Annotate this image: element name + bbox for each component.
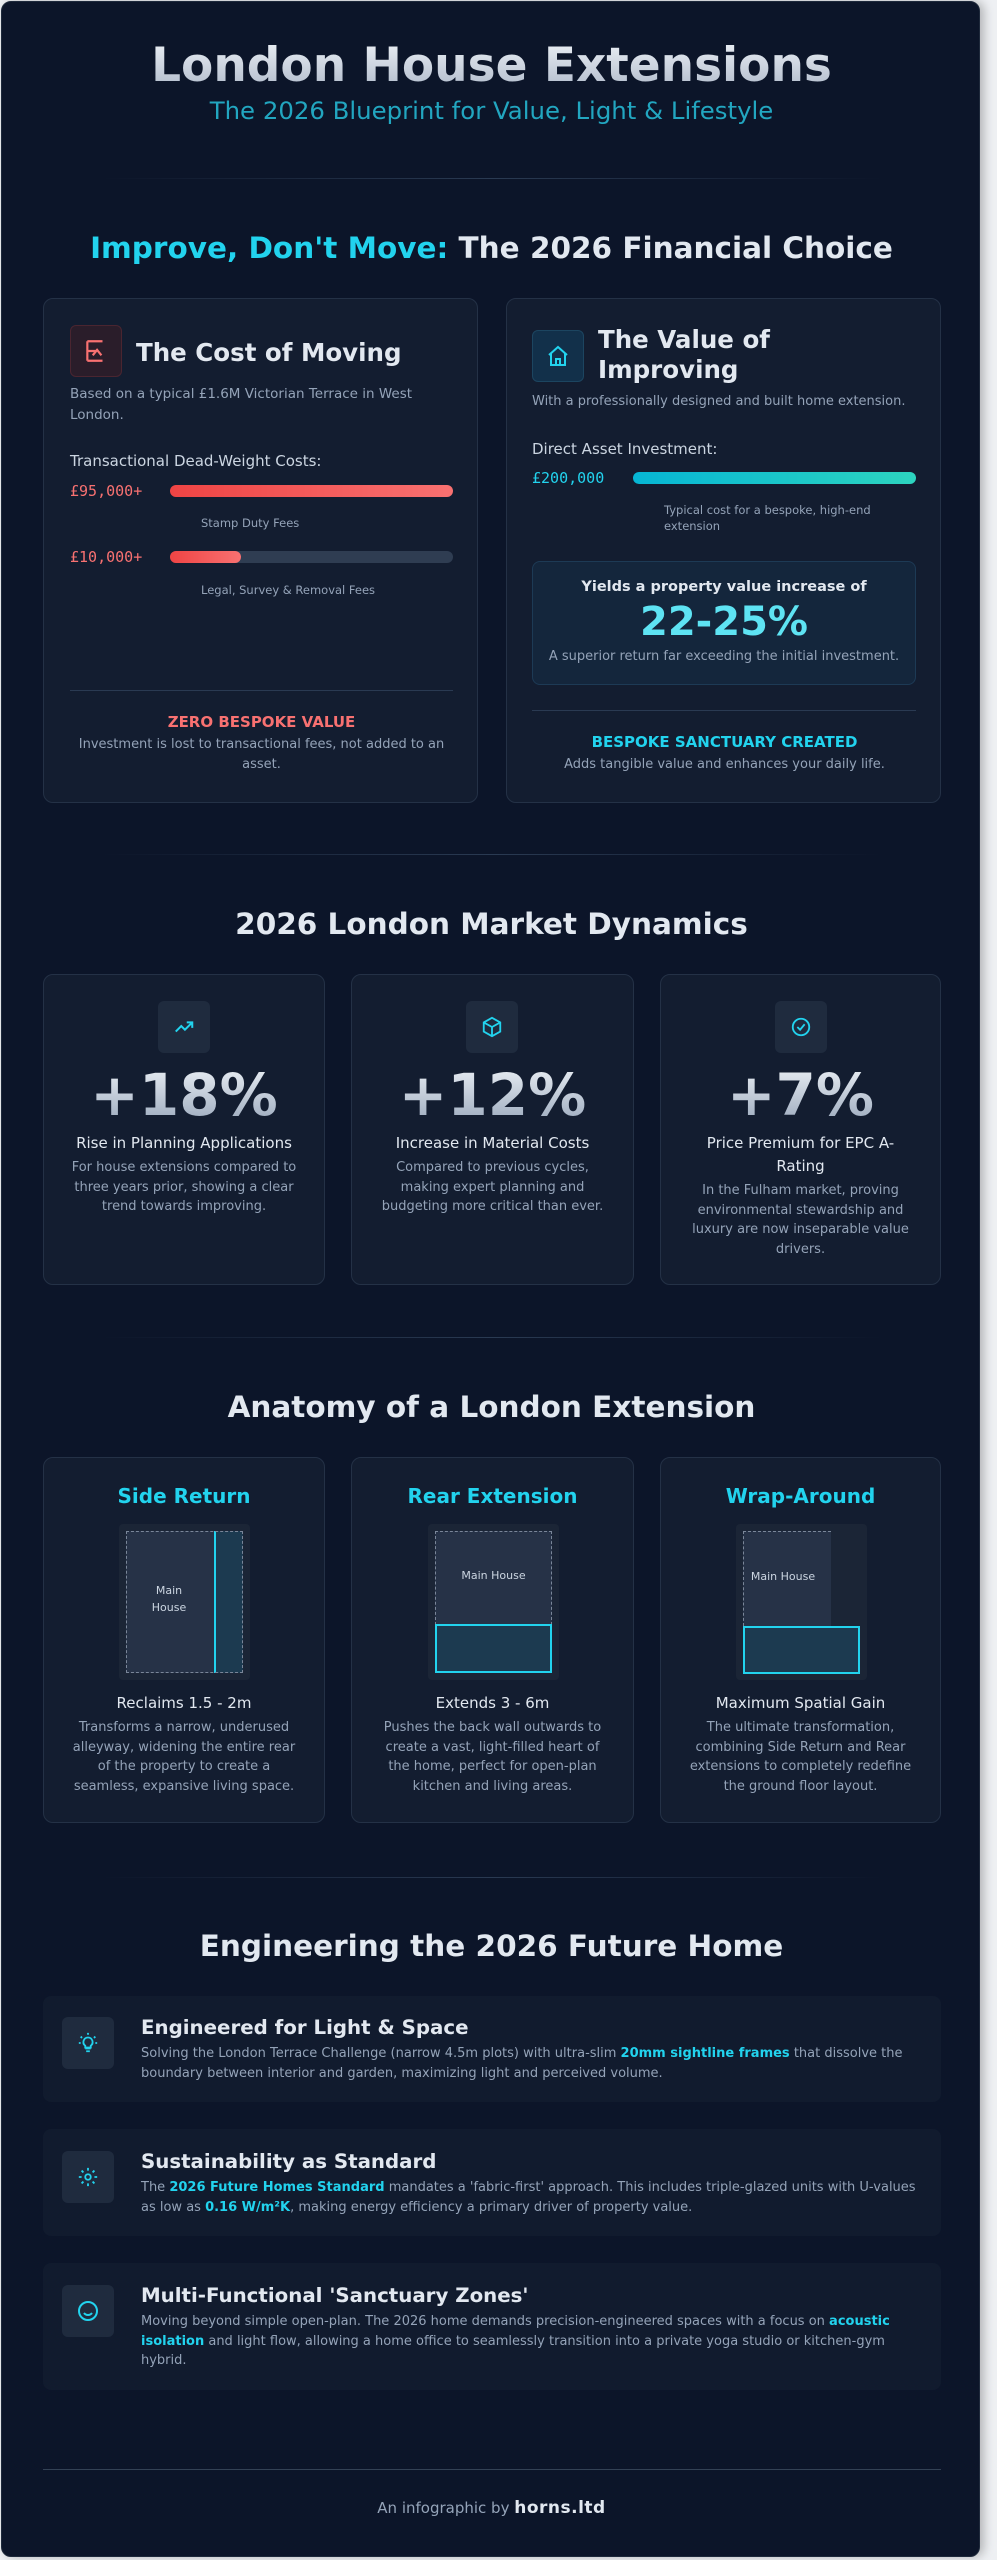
panel: rear extension: Extends 3 - 6m: [436, 1694, 549, 1712]
stat desc: In the Fulham market, proving environmental stewardship and luxury are now inseparable value drivers.: [692, 1183, 909, 1257]
panel: side return: Transforms a narrow, underused alleyway, widening the entire rear of the property to create a seamless, expansive living space.: [73, 1720, 295, 1794]
icon: smile: [62, 2285, 114, 2337]
bar: legal fees: [70, 548, 453, 597]
feature: sanctuary zones: Multi-Functional 'Sanctuary Zones': [141, 2284, 528, 2307]
callout: zero value: [79, 713, 444, 772]
heading: engineering: Engineering the 2026 Future Home: [200, 1929, 783, 1963]
label: Direct Asset Investment:: [532, 440, 717, 458]
stat number: [352, 1060, 633, 1130]
stat label: Price Premium for EPC A-Rating: [707, 1134, 894, 1175]
panel: value of improving: [506, 298, 941, 803]
card title: The Value of: [598, 325, 770, 354]
bar: investment: [532, 469, 916, 533]
callout: value increase: A superior return far exceeding the initial investment.: [549, 649, 899, 664]
callout: sanctuary: Adds tangible value and enhances your daily life.: [564, 757, 885, 772]
stat number: [44, 1060, 324, 1130]
card title: The Cost of Moving: [136, 338, 402, 367]
bar: stamp duty: Stamp Duty Fees: [201, 516, 299, 530]
subtitle: The 2026 Blueprint for Value, Light & Lifestyle: [210, 96, 773, 125]
bar: legal fees: £10,000+: [70, 548, 142, 566]
feature: sanctuary zones: Moving beyond simple open-plan. The 2026 home demands precision-engineered spaces with a focus on acoustic isolation and light flow, allowing a home office to seamlessly transition into a private yoga studio or kitchen-gym hybrid.: [141, 2314, 890, 2368]
stat number: +18%: [90, 1061, 278, 1129]
feature: sustainability: The 2026 Future Homes Standard mandates a 'fabric-first' approach. This includes triple-glazed units with U-values as low as 0.16 W/m²K, making energy efficiency a primary driver of property value.: [141, 2180, 916, 2215]
diagram: side return: Main: [156, 1584, 182, 1597]
panel: rear extension: [351, 1457, 634, 1823]
feature: light & space: Engineered for Light & Space: [141, 2016, 469, 2039]
bar: investment: £200,000: [532, 469, 604, 487]
stat label: Increase in Material Costs: [396, 1134, 589, 1152]
callout: sanctuary: BESPOKE SANCTUARY CREATED: [592, 733, 857, 751]
diagram: rear: [428, 1524, 559, 1680]
feature: sustainability: Sustainability as Standard: [141, 2150, 436, 2173]
diagram: wrap: Main House: [751, 1570, 815, 1583]
icon: moving: [70, 325, 122, 377]
panel: side return: [43, 1457, 325, 1823]
card subtitle: With a professionally designed and built home extension.: [532, 394, 906, 409]
stat number: [661, 1060, 940, 1130]
card title: [598, 325, 770, 384]
stat label: Rise in Planning Applications: [76, 1134, 292, 1152]
stat card: materials: [351, 974, 634, 1285]
panel: side return: Side Return: [118, 1484, 250, 1508]
heading: anatomy: Anatomy of a London Extension: [228, 1390, 755, 1424]
panel: cost of moving: [43, 298, 478, 803]
diagram: side return: [119, 1524, 250, 1680]
diagram: side return: House: [152, 1601, 186, 1614]
panel: side return: Reclaims 1.5 - 2m: [117, 1694, 251, 1712]
stat number: +7%: [727, 1061, 874, 1129]
bar: stamp duty: £95,000+: [70, 482, 142, 500]
bar: investment: Typical cost for a bespoke, high-end extension: [664, 503, 871, 533]
heading: financial choice: Improve, Don't Move: The 2026 Financial Choice: [90, 231, 893, 265]
icon: sun: [62, 2151, 114, 2203]
icon: bulb: [62, 2017, 114, 2069]
callout: value increase: Yields a property value increase of: [581, 579, 867, 595]
feature: light & space: Solving the London Terrace Challenge (narrow 4.5m plots) with ultra-slim 20mm sightline frames that dissolve the boundary between interior and garden, maximizing light and perceived volume.: [141, 2046, 902, 2081]
icon: badge: [775, 1001, 827, 1053]
bar: stamp duty: [70, 482, 453, 530]
icon: trend: [158, 1001, 210, 1053]
panel: rear extension: Pushes the back wall outwards to create a vast, light-filled heart of the home, perfect for open-plan kitchen and living areas.: [384, 1720, 601, 1794]
panel: wrap-around: [660, 1457, 941, 1823]
panel: wrap-around: Wrap-Around: [726, 1484, 875, 1508]
icon: house: [532, 330, 584, 382]
heading: market dynamics: 2026 London Market Dynamics: [235, 907, 748, 941]
diagram: rear: Main House: [461, 1569, 526, 1582]
card title: Improving: [598, 355, 738, 384]
callout: value increase: 22-25%: [640, 599, 808, 645]
stat card: EPC: [660, 974, 941, 1285]
footer: An infographic by horns.ltd: [377, 2498, 606, 2518]
feature: sustainability: [43, 2129, 941, 2236]
panel: rear extension: Rear Extension: [408, 1484, 577, 1508]
callout: sanctuary: [564, 733, 885, 772]
title: London House Extensions: [151, 38, 832, 93]
stat card: planning: [43, 974, 325, 1285]
icon: box: [466, 1001, 518, 1053]
label: Transactional Dead-Weight Costs:: [70, 452, 321, 470]
callout: value increase: [532, 561, 916, 685]
bar: legal fees: Legal, Survey & Removal Fees: [201, 583, 375, 597]
feature: sanctuary zones: [43, 2263, 941, 2390]
stat number: +12%: [399, 1061, 586, 1129]
card subtitle: Based on a typical £1.6M Victorian Terrace in West London.: [70, 386, 412, 423]
stat desc: Compared to previous cycles, making expert planning and budgeting more critical than ever.: [382, 1160, 603, 1214]
panel: wrap-around: The ultimate transformation, combining Side Return and Rear extensions to completely redefine the ground floor layout.: [690, 1720, 911, 1794]
callout: zero value: ZERO BESPOKE VALUE: [168, 713, 355, 731]
feature: light & space: [43, 1996, 941, 2102]
diagram: wrap: [736, 1524, 867, 1680]
stat desc: For house extensions compared to three years prior, showing a clear trend towards improving.: [72, 1160, 296, 1214]
title: [2, 36, 981, 96]
callout: zero value: Investment is lost to transactional fees, not added to an asset.: [79, 737, 444, 772]
panel: wrap-around: Maximum Spatial Gain: [716, 1694, 885, 1712]
